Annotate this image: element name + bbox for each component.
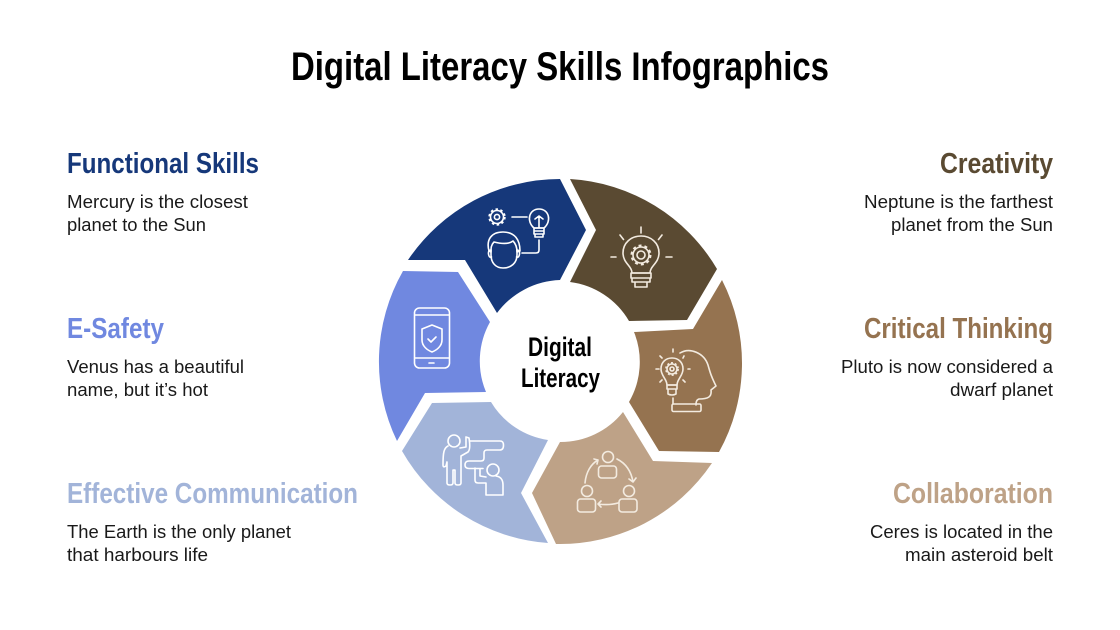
icon: smartphone with shield <box>414 308 450 368</box>
description: creativity: Neptune is the farthest <box>864 192 1053 212</box>
icon: person with gear and bulb <box>488 209 549 268</box>
description: effective communication: The Earth is the only planet <box>67 522 291 542</box>
center label: Literacy <box>521 363 600 393</box>
panel: critical thinking text <box>841 313 1054 400</box>
icon: two people communicating <box>443 435 504 495</box>
heading: effective communication: Effective Communication <box>67 478 358 510</box>
description: creativity <box>864 192 1053 235</box>
description: critical thinking <box>841 357 1054 400</box>
panel: e-safety text <box>67 313 244 400</box>
panel: creativity text <box>864 148 1053 235</box>
segment: collaboration <box>532 412 712 544</box>
panel: collaboration text <box>870 478 1053 565</box>
description: creativity: planet from the Sun <box>891 215 1053 235</box>
description: collaboration: main asteroid belt <box>905 545 1053 565</box>
segment: functional skills <box>408 179 586 313</box>
description: critical thinking: Pluto is now considered a <box>841 357 1054 377</box>
icon: lightbulb with gear <box>611 227 672 287</box>
title: Digital Literacy Skills Infographics <box>291 45 829 89</box>
panel: functional skills text <box>67 148 259 235</box>
icon: head with lightbulb <box>656 349 716 412</box>
description: e-safety <box>67 357 244 400</box>
cycle diagram <box>379 179 742 544</box>
description: collaboration <box>870 522 1053 565</box>
segment: effective communication <box>402 402 548 543</box>
description: effective communication <box>67 522 291 565</box>
description: functional skills <box>67 192 248 235</box>
description: collaboration: Ceres is located in the <box>870 522 1053 542</box>
description: functional skills: planet to the Sun <box>67 215 206 235</box>
description: e-safety: name, but it’s hot <box>67 380 208 400</box>
heading: creativity: Creativity <box>940 148 1053 180</box>
center label: Digital <box>528 332 592 362</box>
description: functional skills: Mercury is the closest <box>67 192 248 212</box>
segment: critical thinking <box>629 280 742 452</box>
heading: functional skills: Functional Skills <box>67 148 259 180</box>
heading: collaboration: Collaboration <box>893 478 1053 510</box>
description: effective communication: that harbours life <box>67 545 208 565</box>
center label <box>521 332 600 393</box>
segment: e-safety <box>379 271 490 441</box>
description: critical thinking: dwarf planet <box>950 380 1053 400</box>
description: e-safety: Venus has a beautiful <box>67 357 244 377</box>
heading: e-safety: E-Safety <box>67 313 164 345</box>
panel: effective communication text <box>67 478 358 565</box>
segment: creativity <box>570 179 717 321</box>
heading: critical thinking: Critical Thinking <box>864 313 1053 345</box>
icon: three people collaborating <box>578 452 637 512</box>
